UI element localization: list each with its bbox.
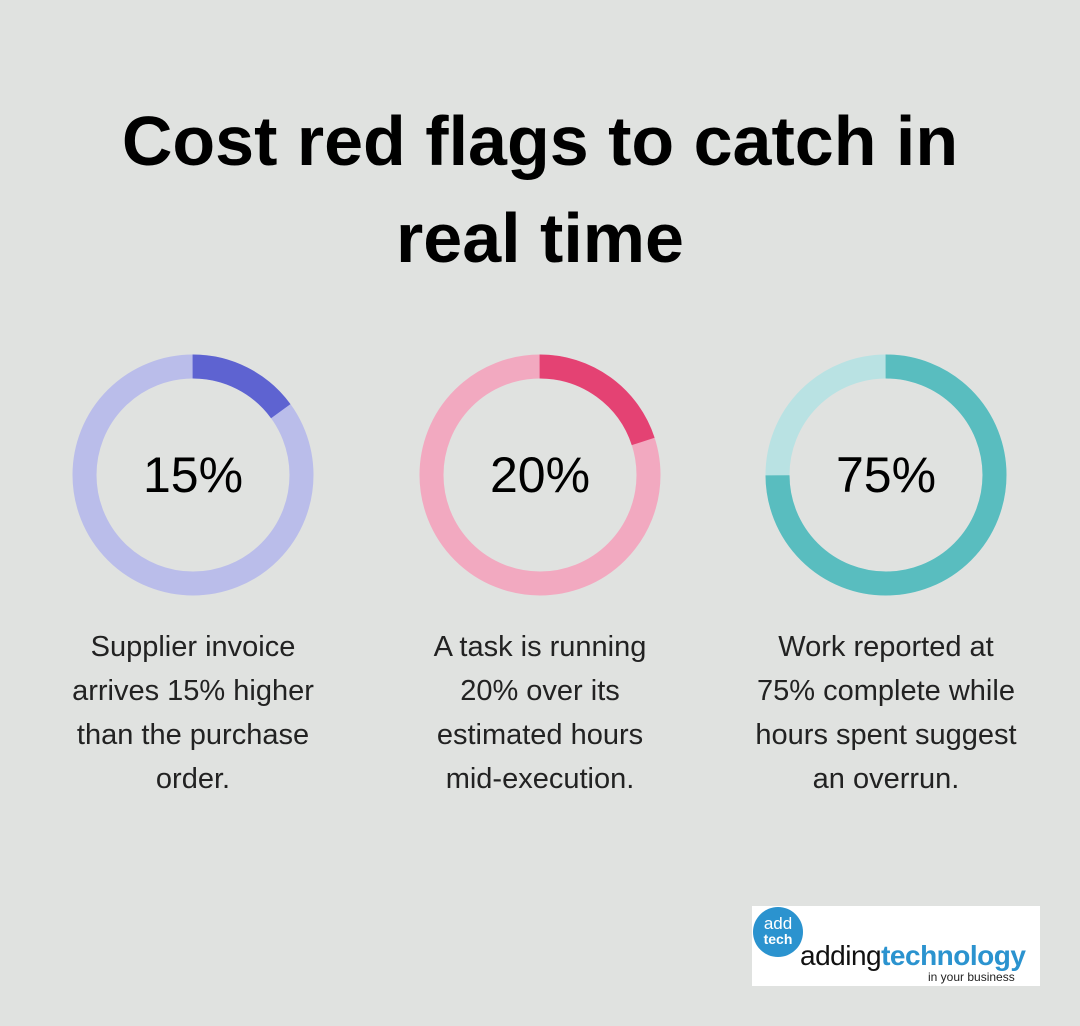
donut: 20% bbox=[420, 354, 660, 596]
logo: in your business bbox=[928, 970, 1015, 984]
percent 20: 20% bbox=[490, 447, 590, 503]
title: Cost red flags to catch in bbox=[122, 102, 958, 180]
description 2: A task is running 20% over its estimated hours mid-execution. bbox=[434, 631, 646, 795]
title bbox=[122, 102, 958, 277]
donut: 15% bbox=[72, 354, 314, 596]
logo circle: add bbox=[764, 914, 792, 933]
logo bbox=[752, 906, 1040, 986]
percent 75: 75% bbox=[836, 447, 936, 503]
logo circle bbox=[753, 907, 803, 957]
description 1: Supplier invoice arrives 15% higher than the purchase order. bbox=[72, 631, 314, 795]
description 3: Work reported at 75% complete while hours spent suggest an overrun. bbox=[755, 631, 1017, 795]
logo circle: tech bbox=[764, 931, 792, 947]
percent 15: 15% bbox=[143, 447, 243, 503]
logo text: addingtechnology bbox=[800, 940, 1025, 971]
donut: 75% bbox=[766, 354, 1006, 596]
title: real time bbox=[396, 199, 684, 277]
